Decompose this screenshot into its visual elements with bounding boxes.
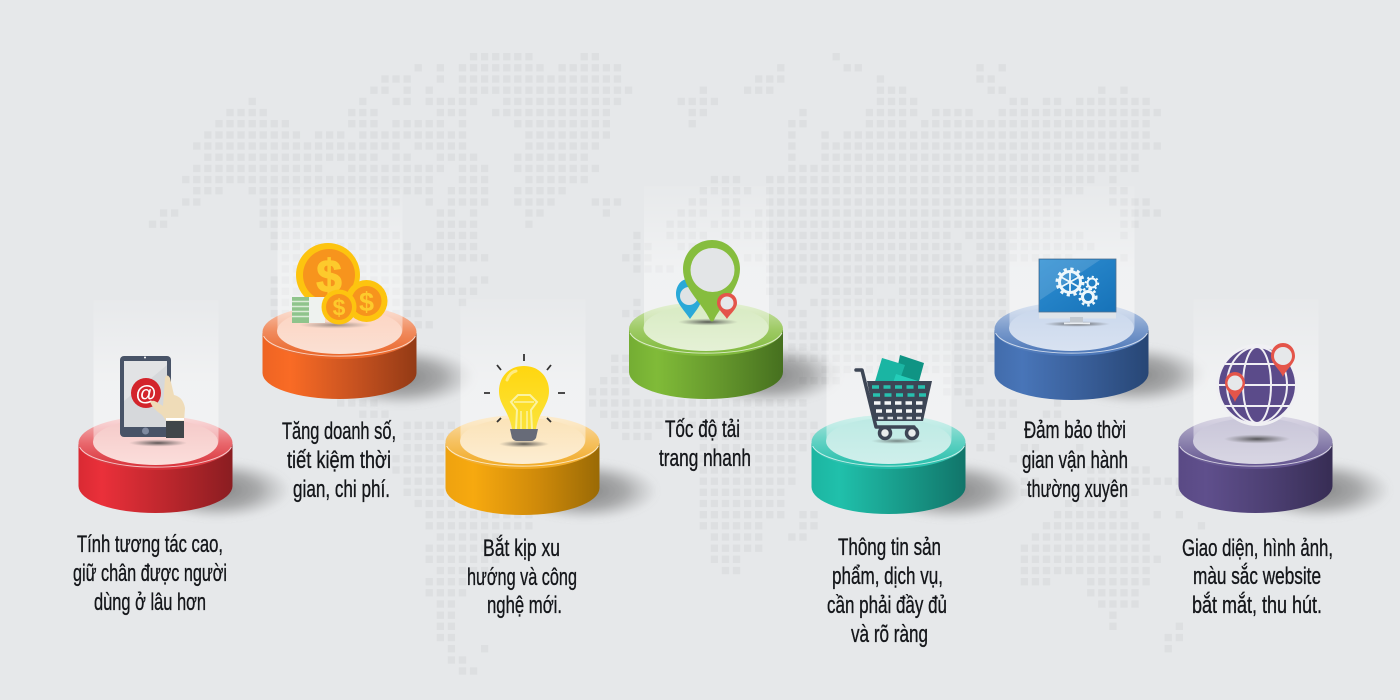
panel: item 7 purple <box>1178 299 1392 619</box>
label: item 1: giữ chân được người <box>73 560 227 587</box>
pedestal: purple <box>1178 299 1392 520</box>
panel: item 3 yellow <box>446 299 658 619</box>
pedestal: orange <box>262 189 476 407</box>
label: item 6: thường xuyên <box>1027 476 1128 503</box>
label: item 2: tiết kiệm thời <box>287 447 391 474</box>
label: item 1: dùng ở lâu hơn <box>94 589 206 616</box>
label: item 3: nghệ mới. <box>487 592 562 619</box>
panel: item 6 blue <box>994 186 1208 503</box>
label: item 5 <box>827 534 947 648</box>
world map: dotted grid <box>149 57 1209 671</box>
label: item 5: phẩm, dịch vụ, <box>832 563 943 590</box>
icon: globe with pins <box>1216 343 1298 444</box>
label: item 7: Giao diện, hình ảnh, <box>1182 535 1333 562</box>
label: item 2: gian, chi phí. <box>293 476 390 503</box>
label: item 7: màu sắc website <box>1193 563 1321 590</box>
icon: coins and banknotes: $ <box>333 294 346 320</box>
icon: light bulb <box>484 354 565 448</box>
icon: tablet with hand: @ <box>136 382 156 406</box>
label: item 6: gian vận hành <box>1022 447 1128 474</box>
panel: item 5 teal <box>812 299 1024 648</box>
label: item 3 <box>467 535 577 619</box>
pedestal: green <box>629 186 842 405</box>
icon: coins and banknotes: $ <box>316 250 342 302</box>
panel: item 4 green <box>629 186 842 472</box>
label: item 6: Đảm bảo thời <box>1024 417 1126 444</box>
icon: monitor with gears <box>1039 259 1116 327</box>
panel: item 2 orange <box>262 189 476 503</box>
pedestal: blue <box>994 186 1208 405</box>
label: item 4 <box>659 416 751 472</box>
pedestal: yellow <box>446 299 658 521</box>
label: item 2: Tăng doanh số, <box>282 418 396 445</box>
label: item 1 <box>73 531 227 616</box>
label: item 3: hướng và công <box>467 564 577 591</box>
pedestal: teal <box>812 299 1024 521</box>
label: item 4: trang nhanh <box>659 445 751 472</box>
pedestal: red <box>78 300 292 520</box>
icon: location pins <box>676 240 740 326</box>
icon: shopping cart <box>856 355 932 444</box>
label: item 3: Bắt kịp xu <box>483 535 560 562</box>
icon: tablet with hand <box>120 356 187 446</box>
label: item 2 <box>282 418 396 503</box>
label: item 5: Thông tin sản <box>838 534 941 561</box>
label: item 1: Tính tương tác cao, <box>77 531 223 558</box>
label: item 5: và rõ ràng <box>851 621 928 648</box>
label: item 6 <box>1022 417 1128 503</box>
label: item 7: bắt mắt, thu hút. <box>1192 592 1322 619</box>
label: item 4: Tốc độ tải <box>665 416 740 443</box>
icon: coins and banknotes: $ <box>359 287 374 317</box>
panel: item 1 red <box>73 300 292 616</box>
label: item 7 <box>1182 535 1333 619</box>
icon: coins and banknotes <box>292 243 388 328</box>
label: item 5: cần phải đầy đủ <box>827 592 947 619</box>
